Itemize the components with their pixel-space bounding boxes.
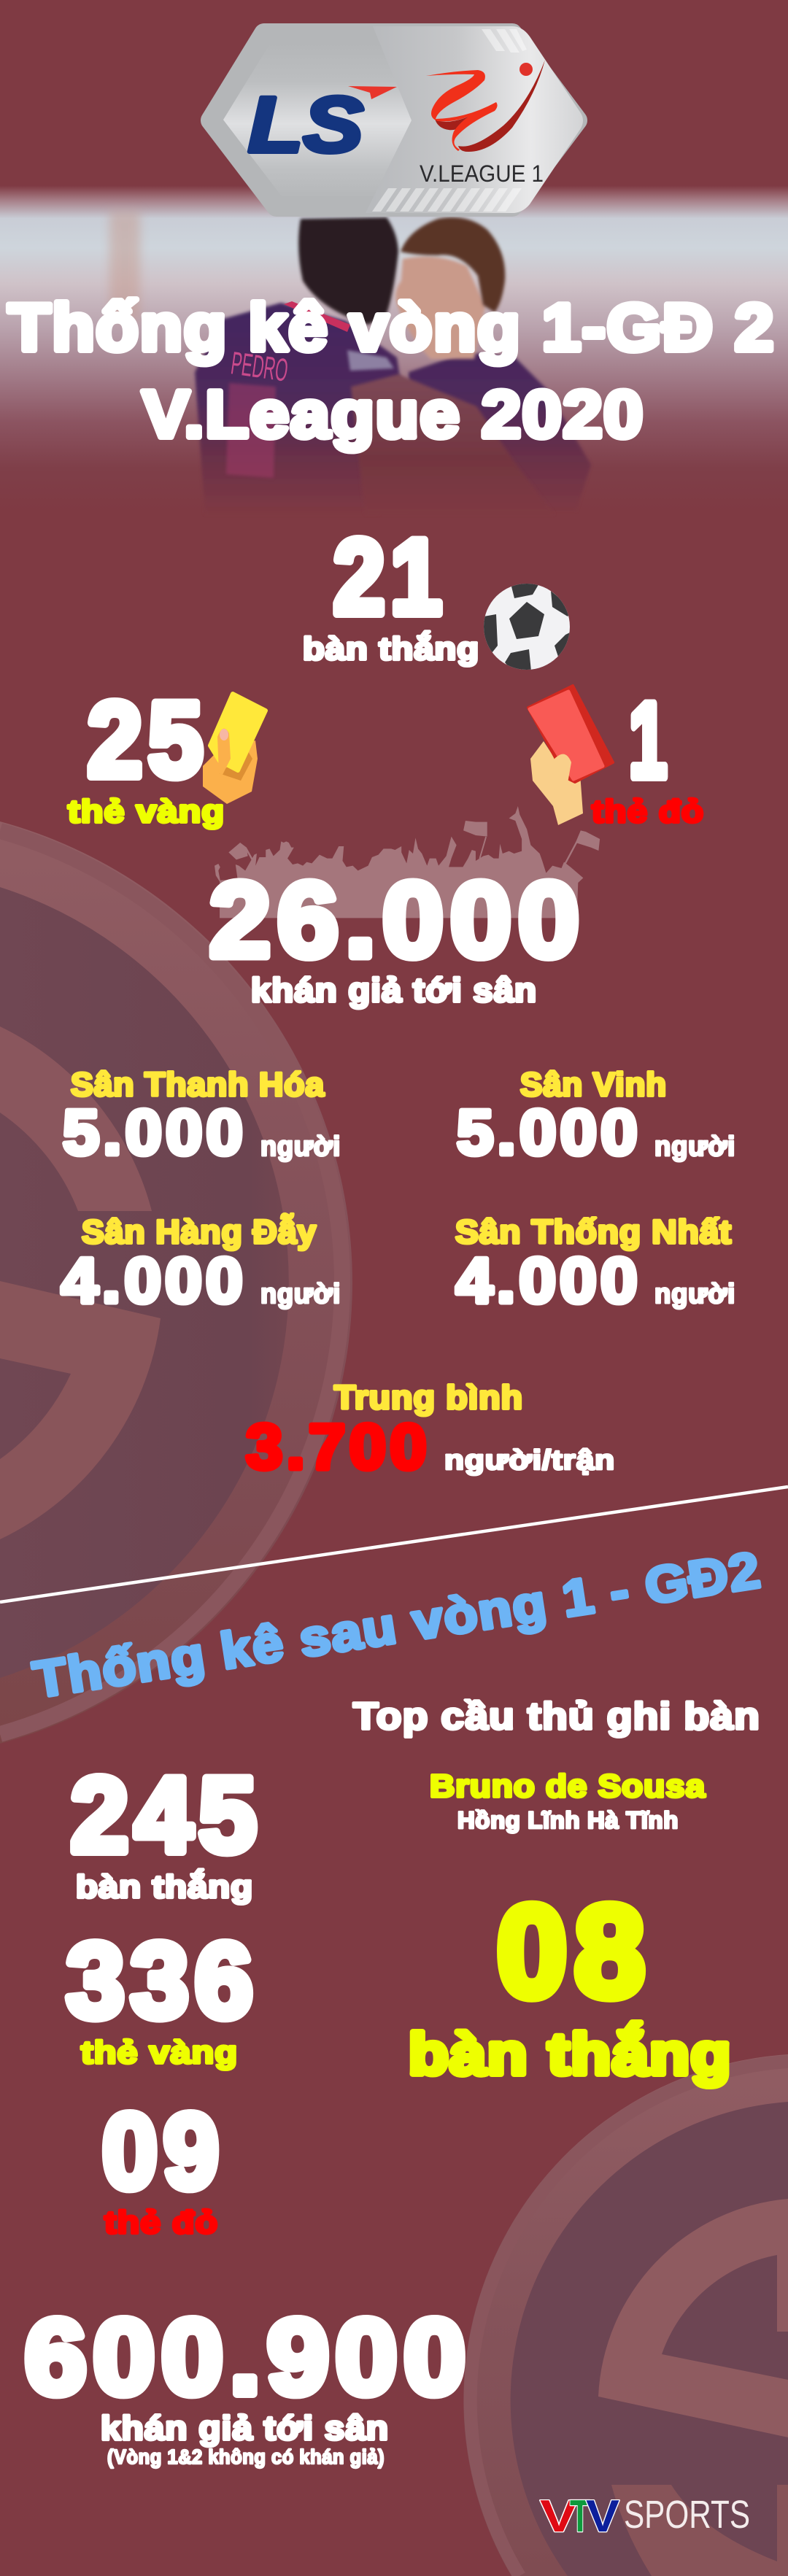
stadium: Sân Vinh: người bbox=[654, 1132, 735, 1162]
top scorer panel: bàn thắng bbox=[409, 2022, 732, 2086]
icon: crowd silhouette bbox=[215, 806, 600, 918]
average attendance: người/trận bbox=[444, 1445, 615, 1476]
photo: player shirt name: PEDRO bbox=[229, 345, 290, 389]
stat: 21 goals: 21 bbox=[333, 517, 447, 636]
logo label: V.LEAGUE 1: V.LEAGUE 1 bbox=[420, 160, 544, 187]
stadium: Sân Vinh: 5.000 bbox=[457, 1097, 641, 1168]
stadium: Sân Thống Nhất bbox=[455, 1213, 735, 1316]
cumulative stat: 245 goals: bàn thắng bbox=[76, 1868, 253, 1905]
logo: red swoosh bbox=[426, 60, 545, 152]
stat: 1 red card: thẻ đỏ bbox=[592, 794, 704, 829]
logo: VTV Sports: V bbox=[586, 2491, 619, 2542]
stadium: Sân Thanh Hóa bbox=[63, 1066, 341, 1168]
cumulative stat: 600.900 spectators: (Vòng 1&2 không có khán giả) bbox=[107, 2445, 385, 2468]
photo: right player's face bbox=[395, 257, 485, 359]
stadium: Sân Thống Nhất: người bbox=[654, 1279, 735, 1310]
title: Thống kê vòng 1-GĐ 2 bbox=[8, 291, 775, 365]
stadium: Sân Vinh bbox=[457, 1066, 735, 1168]
logo: LS V.League 1 badge bbox=[211, 26, 583, 213]
stat: 1 red card bbox=[592, 681, 704, 829]
photo: right player's hair bbox=[401, 217, 505, 312]
watermark: right club crest bbox=[463, 2054, 788, 2576]
stat: 21 goals bbox=[303, 517, 479, 667]
stadium: Sân Thống Nhất: Sân Thống Nhất bbox=[455, 1213, 732, 1250]
cumulative stat: 336 yellow cards: thẻ vàng bbox=[81, 2035, 238, 2070]
cumulative stat: 245 goals: 245 bbox=[71, 1755, 263, 1874]
top scorer panel: Top cầu thủ ghi bàn bbox=[353, 1695, 760, 1738]
cumulative stat: 600.900 spectators: khán giả tới sân bbox=[101, 2409, 389, 2447]
stat: 21 goals: bàn thắng bbox=[303, 630, 479, 667]
diagonal divider line bbox=[0, 1487, 788, 1602]
stat: 26.000 spectators: 26.000 bbox=[209, 860, 586, 979]
average attendance: Trung bình bbox=[334, 1379, 523, 1416]
logo wordmark: LS: LS bbox=[248, 80, 363, 169]
stadium: Sân Hàng Đẫy bbox=[61, 1213, 341, 1316]
stadium: Sân Hàng Đẫy: Sân Hàng Đẫy bbox=[82, 1213, 317, 1250]
cumulative stat: 09 red cards: thẻ đỏ bbox=[104, 2205, 218, 2240]
stat: 26.000 spectators: khán giả tới sân bbox=[251, 971, 537, 1009]
logo: VTV Sports bbox=[540, 2491, 750, 2542]
icon: hand with yellow card bbox=[203, 694, 266, 804]
average attendance bbox=[246, 1379, 615, 1482]
logo: VTV Sports: V bbox=[540, 2491, 578, 2542]
stat: 25 yellow cards: 25 bbox=[88, 680, 209, 799]
average attendance: 3.700 bbox=[246, 1412, 430, 1482]
stadium: Sân Thanh Hóa: 5.000 bbox=[63, 1097, 247, 1168]
stadium: Sân Thanh Hóa: người bbox=[260, 1132, 341, 1162]
heading: stats after round 1: Thống kê sau vòng 1 - GĐ2 bbox=[29, 1541, 765, 1709]
watermark: left club crest bbox=[0, 821, 352, 1744]
stadium: Sân Thống Nhất: 4.000 bbox=[456, 1245, 641, 1316]
icon: football bbox=[484, 584, 570, 670]
stat: 25 yellow cards bbox=[68, 680, 225, 829]
title: V.League 2020 bbox=[142, 378, 644, 452]
logo: VTV Sports: T bbox=[570, 2491, 590, 2542]
cumulative stat: 600.900 spectators: 600.900 bbox=[25, 2297, 472, 2416]
top scorer panel bbox=[353, 1695, 760, 2086]
stadium: Sân Thanh Hóa: Sân Thanh Hóa bbox=[71, 1066, 325, 1103]
top scorer panel: Bruno de Sousa bbox=[430, 1768, 706, 1804]
logo arrow bbox=[348, 86, 397, 99]
cumulative stat: 336 yellow cards: 336 bbox=[66, 1921, 259, 2040]
icon: hand with red card bbox=[528, 686, 613, 825]
logo: VTV Sports: SPORTS bbox=[624, 2493, 750, 2537]
title bbox=[8, 291, 775, 452]
stat: 1 red card: 1 bbox=[629, 681, 668, 800]
cumulative stat: 600.900 spectators bbox=[25, 2297, 472, 2468]
top scorer panel: 08 bbox=[497, 1879, 652, 2024]
stadium: Sân Vinh: Sân Vinh bbox=[520, 1066, 667, 1103]
stadium: Sân Hàng Đẫy: người bbox=[260, 1279, 341, 1310]
stat: 25 yellow cards: thẻ vàng bbox=[68, 794, 225, 829]
cumulative stat: 09 red cards: 09 bbox=[102, 2092, 225, 2211]
photo: left player's head bbox=[298, 217, 398, 325]
photo: two players celebrating bbox=[0, 182, 788, 514]
stadium: Sân Hàng Đẫy: 4.000 bbox=[61, 1245, 247, 1316]
top scorer panel: Hồng Lĩnh Hà Tĩnh bbox=[457, 1807, 679, 1833]
